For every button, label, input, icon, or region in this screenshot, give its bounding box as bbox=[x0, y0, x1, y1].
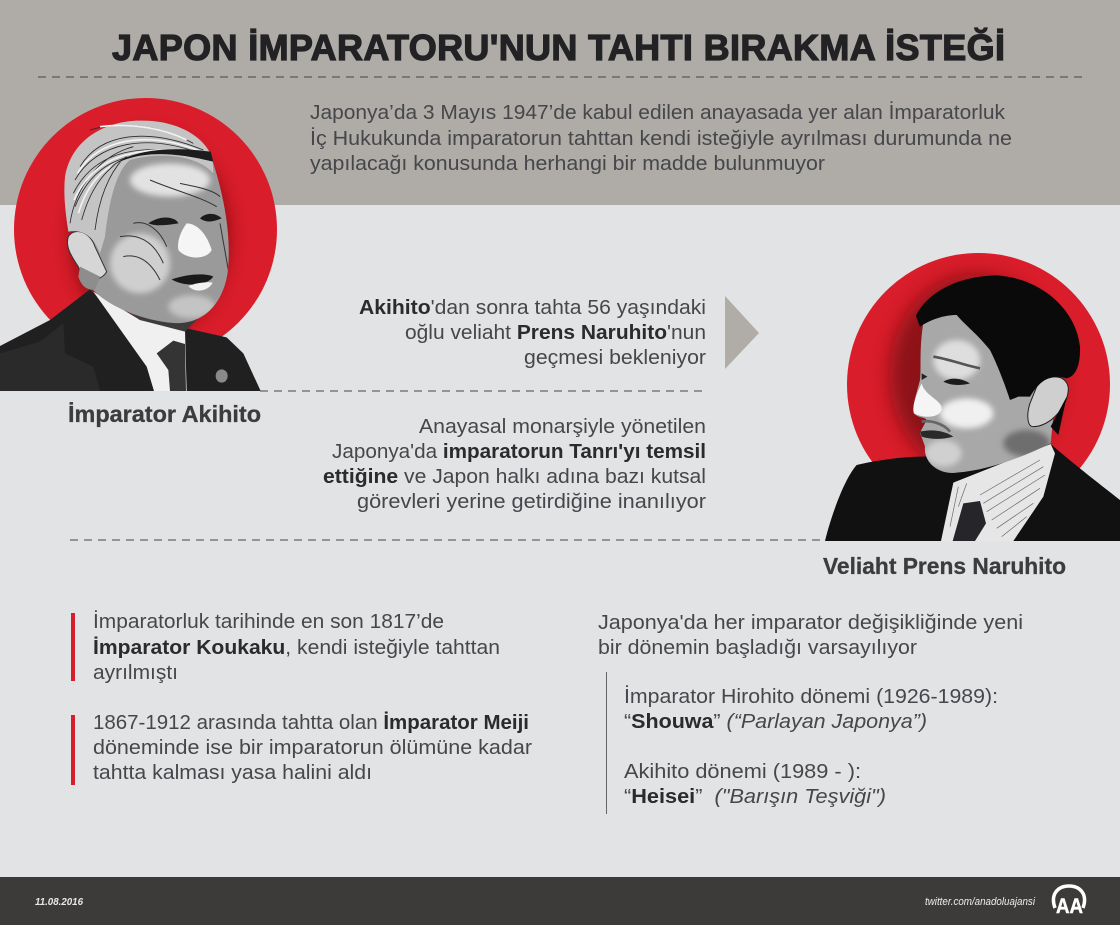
eyes bbox=[148, 218, 178, 225]
text: new era bbox=[598, 612, 1023, 659]
intro text: yapılacağı konusunda herhangi bir madde bulunmuyor bbox=[310, 153, 825, 175]
text: monarchy: Japonya'da imparatorun Tanrı'yı temsil bbox=[332, 441, 706, 463]
text: Meiji bbox=[93, 711, 532, 784]
text: Hirohito era bbox=[624, 685, 998, 733]
neck shadow bbox=[83, 277, 200, 332]
text: monarchy: ettiğine ve Japon halkı adına bazı kutsal bbox=[323, 466, 706, 488]
text: succession: geçmesi bekleniyor bbox=[524, 347, 706, 369]
red marker 1 bbox=[71, 613, 75, 681]
intro text: Japonya’da 3 Mayıs 1947’de kabul edilen anayasada yer alan İmparatorluk bbox=[310, 101, 1006, 124]
shirt bbox=[93, 292, 187, 391]
text: succession: Akihito'dan sonra tahta 56 yaşındaki bbox=[359, 297, 706, 319]
text: Akihito era bbox=[624, 761, 886, 808]
name: Naruhito: Veliaht Prens Naruhito bbox=[823, 553, 1066, 579]
face bbox=[90, 153, 229, 323]
intro text: İç Hukukunda imparatorun tahttan kendi isteğiyle ayrılması durumunda ne bbox=[310, 127, 1012, 150]
text: Meiji: döneminde ise bir imparatorun ölümüne kadar bbox=[93, 737, 532, 759]
mouth bbox=[172, 274, 213, 285]
portrait: Emperor Akihito bbox=[0, 98, 277, 391]
nose bbox=[178, 223, 212, 257]
text: Meiji: tahtta kalması yasa halini aldı bbox=[93, 762, 372, 784]
face bbox=[913, 313, 1057, 473]
tie bbox=[157, 341, 186, 391]
text: monarchy bbox=[323, 416, 706, 513]
text: new era: bir dönemin başladığı varsayılıyor bbox=[598, 637, 917, 659]
text: Koukaku: İmparatorluk tarihinde en son 1817’de bbox=[93, 610, 444, 633]
hair bbox=[916, 275, 1080, 400]
shirt bbox=[941, 444, 1055, 541]
text: new era: Japonya'da her imparator değişikliğinde yeni bbox=[598, 612, 1023, 634]
text: monarchy: görevleri yerine getirdiğine inanılıyor bbox=[357, 491, 706, 513]
date: 11.08.2016 bbox=[35, 897, 83, 908]
text: Hirohito era: “Shouwa ” (“Parlayan Japonya”) bbox=[624, 711, 927, 733]
text: Meiji: 1867-1912 arasında tahtta olan İmparator Meiji bbox=[93, 711, 529, 734]
text: Akihito era: “Heisei ” ("Barışın Teşviği") bbox=[624, 786, 886, 808]
tie bbox=[953, 501, 986, 541]
text: monarchy: Anayasal monarşiyle yönetilen bbox=[419, 416, 706, 438]
portrait: Crown Prince Naruhito bbox=[825, 253, 1120, 541]
text: Akihito era: Akihito dönemi (1989 - ): bbox=[624, 761, 861, 783]
red marker 2 bbox=[71, 715, 75, 785]
header band bbox=[0, 0, 1120, 205]
name: Akihito: İmparator Akihito bbox=[68, 401, 261, 427]
title: JAPON İMPARATORU'NUN TAHTI BIRAKMA İSTEĞİ bbox=[112, 27, 1005, 68]
footer band bbox=[0, 877, 1120, 925]
logo: AA bbox=[1056, 895, 1083, 918]
nose and mouth bbox=[913, 383, 942, 417]
suit bbox=[825, 443, 1120, 541]
hair bbox=[64, 121, 213, 253]
vertical rule bbox=[606, 672, 607, 814]
text: succession bbox=[359, 297, 706, 369]
text: Hirohito era: İmparator Hirohito dönemi (1926-1989): bbox=[624, 685, 998, 708]
logo bbox=[1053, 886, 1085, 918]
lapel pin bbox=[216, 369, 228, 383]
text: Koukaku: ayrılmıştı bbox=[93, 662, 178, 684]
intro text bbox=[310, 101, 1012, 175]
text: Koukaku: İmparator Koukaku , kendi isteğiyle tahttan bbox=[93, 636, 500, 659]
ear bbox=[1028, 377, 1068, 427]
twitter handle: twitter.com/anadoluajansi bbox=[925, 896, 1035, 908]
ear bbox=[67, 231, 107, 279]
arrow bbox=[725, 296, 759, 369]
text: Koukaku bbox=[93, 610, 500, 684]
text: succession: oğlu veliaht Prens Naruhito 'nun bbox=[405, 322, 706, 344]
brow and eye bbox=[933, 357, 980, 368]
suit bbox=[0, 289, 261, 391]
